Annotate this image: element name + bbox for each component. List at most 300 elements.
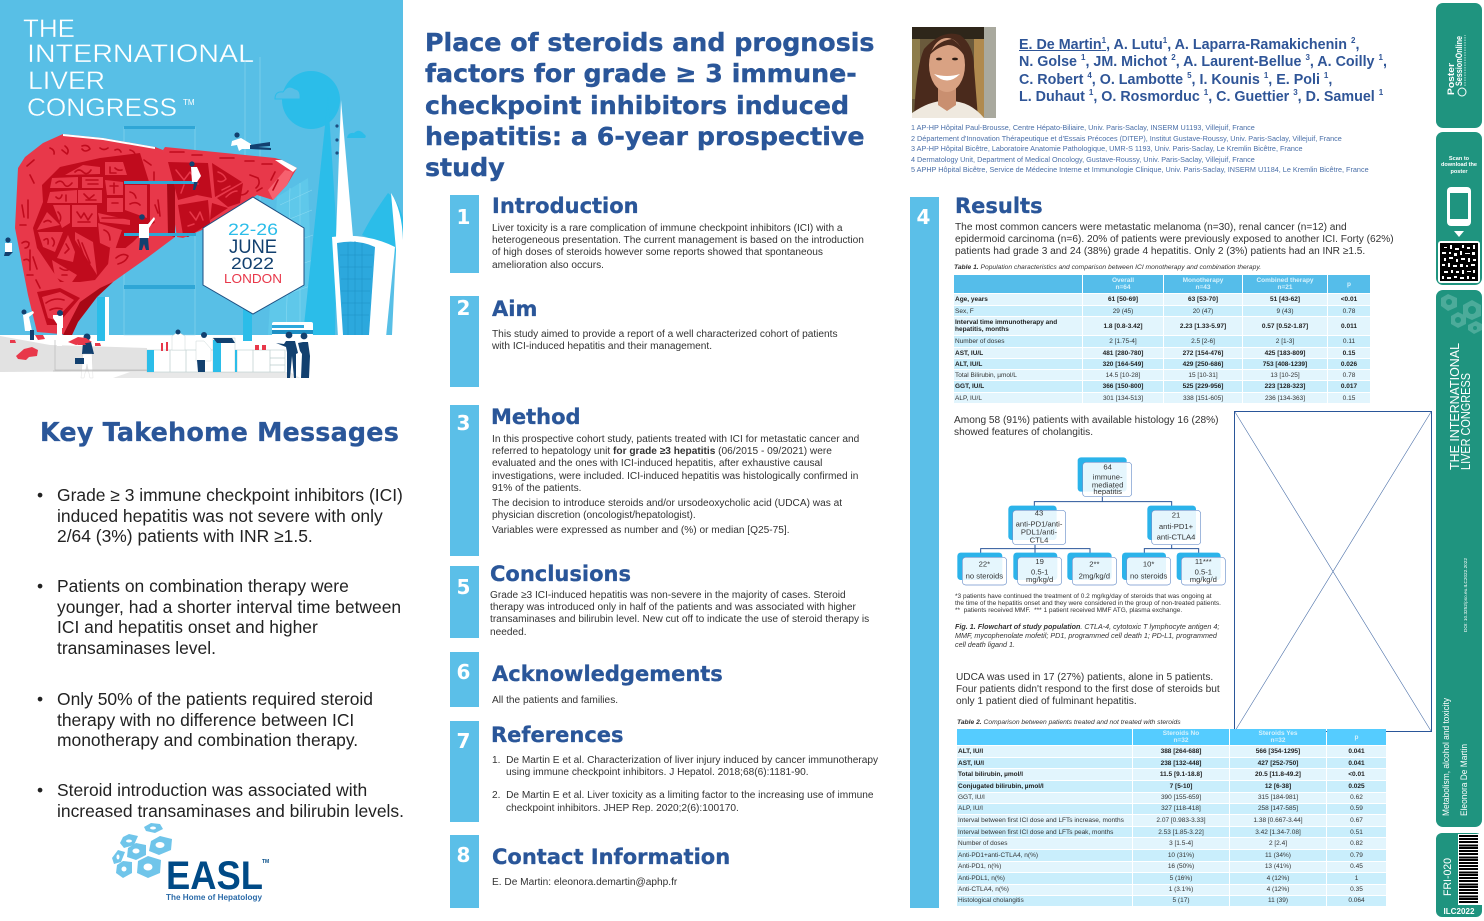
box: 64 immune-mediated hepatitis xyxy=(1078,457,1132,497)
takehome message 2: Patients on combination therapy were xyxy=(57,576,349,596)
scan to download panel: Scan to xyxy=(1449,156,1470,162)
congress side panel xyxy=(1436,290,1482,827)
table 2: ALP, IU/l xyxy=(958,805,983,812)
author photo xyxy=(912,27,996,118)
section 8 text: E. De Martin: eleonora.demartin@aphp.fr xyxy=(492,877,677,888)
section 1 number bar xyxy=(450,195,479,273)
table 2: 4 (12%) xyxy=(1267,875,1289,882)
takehome message 1 xyxy=(37,485,403,546)
takehome message 1: • xyxy=(37,485,43,505)
table 1: 20 (47) xyxy=(1193,308,1213,314)
table 2: 0.62 xyxy=(1350,794,1363,801)
histology text: Among 58 (91%) patients with available histology 16 (28%) xyxy=(954,415,1219,426)
table 2: 3.42 [1.34-7.08] xyxy=(1255,828,1301,836)
section 2 text: This study aimed to provide a report of a well characterized cohort of patients xyxy=(492,329,838,340)
congress name: INTERNATIONAL xyxy=(27,40,254,68)
box: 22 no steroids: 22* xyxy=(979,560,990,569)
box: 2 2mg/kg/d xyxy=(1067,553,1117,585)
date hexagon xyxy=(203,197,304,314)
congress name: TM xyxy=(183,98,195,107)
section 7 text: 1. De Martin E et al. Characterization of liver injury induced by cancer immunotherapy xyxy=(492,755,878,766)
table 1: GGT, IU/L xyxy=(955,383,984,390)
section 7 text: using immune checkpoint inhibitors. J Hepatol. 2018;68(6):1181-90. xyxy=(506,767,809,778)
table 2: 5 (16%) xyxy=(1170,875,1192,882)
EASL logo: EASL xyxy=(166,854,263,898)
table 2: 238 [132-448] xyxy=(1161,760,1201,766)
table 1: 0.15 xyxy=(1343,394,1355,402)
table 2: Histological cholangitis xyxy=(958,897,1024,904)
poster number and barcode: FRI-020 xyxy=(1442,858,1454,896)
authors list: C. Robert 4, O. Lambotte 5, I. Kounis 1, E. Poli 1, xyxy=(1019,71,1332,88)
takehome message 2: ICI and hepatitis onset and higher xyxy=(57,617,318,637)
table 1: 429 [250-686] xyxy=(1183,360,1223,368)
table 1: 63 [53-70] xyxy=(1188,296,1218,303)
section 3 number bar: 3 xyxy=(457,411,470,435)
table 2: 1 xyxy=(1355,875,1358,882)
section 3 text: referred to hepatology unit for grade ≥3 hepatitis (06/2015 - 09/2021) were xyxy=(492,446,832,457)
table 2: 390 [155-659] xyxy=(1161,794,1201,801)
poster title: hepatitis: a 6-year prospective xyxy=(425,122,865,151)
congress side panel: THE INTERNATIONAL xyxy=(1448,343,1462,470)
box: 2 2mg/kg/d: 2** xyxy=(1089,560,1099,569)
poster title xyxy=(425,28,874,182)
table 2: Anti-CTLA4, n(%) xyxy=(958,886,1009,893)
table 2: <0.01 xyxy=(1348,771,1365,778)
section 7 text xyxy=(492,755,878,814)
box: 22 no steroids: no steroids xyxy=(966,571,1003,580)
box: 19 0.5-1 mg/kg/d: 0.5-1 xyxy=(1031,567,1048,576)
takehome message 4: increased transaminases and bilirubin levels. xyxy=(57,801,404,821)
figure 1 caption: Fig. 1. Flowchart of study population. CTLA-4, cytotoxic T lymphocyte antigen 4; xyxy=(955,622,1219,631)
table 2: 258 [147-585] xyxy=(1258,805,1298,812)
liver xyxy=(15,134,297,335)
side strip xyxy=(1436,3,1482,917)
box: 11 0.5-1 mg/kg/d: 11*** xyxy=(1195,557,1212,566)
EASL logo xyxy=(112,823,269,902)
table 2: 2.53 [1.85-3.22] xyxy=(1158,828,1204,836)
section 1 heading: Introduction xyxy=(492,194,639,218)
takehome message 3: monotherapy and combination therapy. xyxy=(57,730,358,750)
takehome message 3 xyxy=(37,689,373,750)
table 1: ALT, IU/L xyxy=(955,360,982,368)
takehome message 4 xyxy=(37,780,404,821)
box: 43 anti-PD1: 43 xyxy=(1035,509,1043,518)
box: 22 no steroids xyxy=(957,553,1007,585)
box: 2 2mg/kg/d: 2mg/kg/d xyxy=(1079,571,1110,580)
table 2 caption: Table 2. Comparison between patients treated and not treated with steroids xyxy=(957,719,1181,726)
congress side panel: Metabolism, alcohol and toxicity xyxy=(1440,698,1451,816)
takehome message 3: therapy with no difference between ICI xyxy=(57,710,354,730)
table 2: Anti-PD1, n(%) xyxy=(958,863,1001,870)
table 1: ALP, IU/L xyxy=(955,394,982,402)
table 1: 0.017 xyxy=(1341,383,1357,390)
table 2: 327 [118-418] xyxy=(1161,805,1201,812)
table 1: 0.78 xyxy=(1343,372,1355,378)
results intro text xyxy=(955,222,1394,257)
affiliations: 3 AP-HP Hôpital Bicêtre, Laboratoire Anatomie Pathologique, UMR-S 1193, Univ. Paris-Saclay, Le Kremlin Bicêtre, France xyxy=(911,144,1303,153)
table 2: Interval between first ICI dose and LFTs peak, months xyxy=(958,828,1113,836)
section 5 text: Grade ≥3 ICI-induced hepatitis was non-severe in the majority of cases. Steroid xyxy=(490,590,846,601)
table 1: 366 [150-800] xyxy=(1103,383,1143,390)
table 2: 7 [5-10] xyxy=(1170,783,1192,790)
table 1: n=21 xyxy=(1278,284,1292,291)
authors list xyxy=(1019,36,1387,105)
takehome message 2: • xyxy=(37,576,43,596)
authors list: N. Golse 1, JM. Michot 2, A. Laurent-Bellue 3, A. Coilly 1, xyxy=(1019,54,1387,70)
section 4 number bar xyxy=(910,197,939,908)
section 1 text: heterogeneous presentation. The current management is based on the introduction xyxy=(492,235,864,246)
table 1 caption: Table 1. Population characteristics and comparison between ICI monotherapy and combination therapy. xyxy=(954,264,1261,271)
poster title: factors for grade ≥ 3 immune- xyxy=(425,59,857,88)
UDCA text: Four patients didn't respond to the first dose of steroids but xyxy=(956,684,1220,695)
table 2: 0.025 xyxy=(1348,783,1365,790)
box: 10 no steroids: no steroids xyxy=(1130,571,1168,580)
table 2: 11.5 [9.1-18.8] xyxy=(1160,771,1202,778)
table 2: Number of doses xyxy=(958,840,1008,847)
table 1: 236 [134-363] xyxy=(1265,394,1305,402)
table 2: AST, IU/l xyxy=(958,760,984,766)
inner dark regions xyxy=(33,153,150,282)
results intro text: The most common cancers were metastatic melanoma (n=30), renal cancer (n=12) and xyxy=(955,222,1347,233)
table 2: Conjugated bilirubin, µmol/l xyxy=(958,783,1044,790)
scan to download panel: download the xyxy=(1441,162,1477,168)
section 4 number bar: 4 xyxy=(917,205,930,229)
figure 1 caption: cell death ligand 1. xyxy=(955,640,1015,649)
table 1: Number of doses xyxy=(955,338,1004,345)
section 6 number bar: 6 xyxy=(457,660,470,684)
table 2: 0.59 xyxy=(1350,805,1363,812)
rock debris xyxy=(10,335,101,360)
takehome message 1: 2/64 (3%) patients with INR ≥1.5. xyxy=(57,526,313,546)
table 1: 425 [183-809] xyxy=(1265,350,1305,356)
congress name: LIVER xyxy=(28,67,105,95)
section 7 heading: References xyxy=(491,723,624,747)
takehome message 2: younger, had a shorter interval time between xyxy=(57,597,401,617)
table 2: 11 (34%) xyxy=(1265,852,1291,858)
section 3 text: 91% of the patients. xyxy=(492,483,582,494)
scan to download panel xyxy=(1436,132,1482,285)
table 1: Overall xyxy=(1112,277,1134,284)
section 6 text: All the patients and families. xyxy=(492,695,618,706)
section 5 number bar xyxy=(450,566,479,638)
flowchart of study population xyxy=(957,457,1226,586)
table 1: 2 [1-3] xyxy=(1276,338,1294,345)
table 1: 0.011 xyxy=(1341,322,1357,330)
table 2: 0.51 xyxy=(1350,828,1363,836)
section 2 text: with ICI-induced hepatitis and their management. xyxy=(492,341,712,352)
section 3 number bar xyxy=(450,405,479,556)
section 5 text xyxy=(490,590,869,638)
section 5 text: transaminases and bilirubin level. New cut off to indicate the use of steroid therapy is xyxy=(490,614,869,625)
section 7 number bar xyxy=(450,721,479,822)
section 8 number bar: 8 xyxy=(457,843,470,867)
congress banner illustration xyxy=(0,0,403,378)
box: 64 immune-mediated hepatitis: mediated xyxy=(1092,480,1123,489)
table 2: 11 (39) xyxy=(1268,897,1288,904)
table 1: 29 (45) xyxy=(1113,308,1133,314)
table 2: 13 (41%) xyxy=(1265,863,1291,870)
section 3 text: evaluated and the ones with ICI-induced hepatitis, after exhaustive causal xyxy=(492,458,822,469)
takehome message 1: Grade ≥ 3 immune checkpoint inhibitors (ICI) xyxy=(57,485,403,505)
table 1: AST, IU/L xyxy=(955,350,983,356)
table 2: 0.064 xyxy=(1348,897,1365,904)
poster title: study xyxy=(425,153,505,182)
section 3 text: investigations, were included. ICI-induced hepatitis was histologically confirmed in xyxy=(492,471,858,482)
congress side panel: Eleonora De Martin xyxy=(1458,744,1469,816)
table 2: 1 (3.1%) xyxy=(1169,886,1193,893)
table 1: 223 [128-323] xyxy=(1265,383,1305,390)
box: 64 immune-mediated hepatitis: 64 xyxy=(1103,462,1113,471)
box: 10 no steroids: 10* xyxy=(1143,560,1154,569)
table 2: n=32 xyxy=(1174,737,1188,744)
table 1: 525 [229-956] xyxy=(1183,383,1223,390)
table 1: 0.15 xyxy=(1343,350,1355,356)
takehome message 1: induced hepatitis was not severe with only xyxy=(57,506,383,526)
table 1: 13 [10-25] xyxy=(1270,372,1300,378)
UDCA text: only 1 patient died of fulminant hepatitis. xyxy=(956,696,1137,707)
table 2: 388 [264-688] xyxy=(1161,748,1201,755)
table 2: 20.5 [11.8-49.2] xyxy=(1255,771,1301,778)
EASL logo: The Home of Hepatology xyxy=(166,892,262,902)
flowchart footnotes: the time of the hepatitis onset and they were considered in the group of non-treated patients. xyxy=(955,600,1221,607)
table 1: 51 [43-62] xyxy=(1270,296,1300,303)
poster title: Place of steroids and prognosis xyxy=(425,28,874,57)
table 1: 0.026 xyxy=(1341,360,1357,368)
section 1 text: of high doses of steroids however some reports showed that spontaneous xyxy=(492,247,823,258)
table 2: 0.45 xyxy=(1350,863,1363,870)
affiliations xyxy=(911,123,1369,174)
table 1: 320 [164-549] xyxy=(1103,360,1143,368)
table 2: n=32 xyxy=(1270,737,1286,744)
table 2: 0.041 xyxy=(1348,748,1365,755)
date hexagon: 22-26 xyxy=(228,220,278,239)
section 6 heading: Acknowledgements xyxy=(492,662,723,686)
heading: key takehome messages: Key Takehome Messages xyxy=(40,417,399,447)
table 2: p xyxy=(1354,734,1358,740)
affiliations: 1 AP-HP Hôpital Paul-Brousse, Centre Hépato-Biliaire, Univ. Paris-Saclay, INSERM U1193, Villejuif, France xyxy=(911,123,1255,132)
section 3 text: In this prospective cohort study, patients treated with ICI for metastatic cancer and xyxy=(492,434,859,445)
poster title: checkpoint inhibitors induced xyxy=(425,91,849,120)
table 2: 427 [252-750] xyxy=(1258,760,1298,766)
table 2: 12 [6-38] xyxy=(1265,783,1291,790)
histology text: showed features of cholangitis. xyxy=(954,427,1093,438)
box: 64 immune-mediated hepatitis: immune- xyxy=(1093,472,1123,481)
congress name: CONGRESS xyxy=(27,94,177,122)
table 2: 315 [184-981] xyxy=(1258,794,1298,801)
placeholder image box xyxy=(1234,411,1432,732)
table 2: Total bilirubin, µmol/l xyxy=(958,771,1023,778)
table 2 xyxy=(957,729,1386,906)
box: 43 anti-PD1: anti-PD1/anti- xyxy=(1016,519,1063,528)
table 1: 15 [10-31] xyxy=(1188,372,1218,378)
takehome message 4: • xyxy=(37,780,43,800)
table 1: <0.01 xyxy=(1341,296,1357,303)
table 1: 0.57 [0.52-1.87] xyxy=(1262,322,1308,330)
table 2: 3 [1.5-4] xyxy=(1169,840,1193,847)
poster session online badge: Poster xyxy=(1446,62,1456,95)
congress side panel: DOI: 10.3252/pso.eu.ILC2022.2022 xyxy=(1463,557,1468,632)
table 2: Interval between first ICI dose and LFTs increase, months xyxy=(958,817,1124,824)
poster session online badge: SessionOnline xyxy=(1454,36,1464,86)
box: 43 anti-PD1 xyxy=(1008,506,1066,545)
table 1: n=43 xyxy=(1196,284,1210,291)
table 2: Anti-PD1+anti-CTLA4, n(%) xyxy=(958,852,1038,858)
box: 21 anti-PD1+anti-CTLA4: 21 xyxy=(1172,511,1180,520)
table 2: GGT, IU/l xyxy=(958,794,985,801)
scan to download panel: poster xyxy=(1450,169,1468,175)
table 1: 2 [1.75-4] xyxy=(1109,338,1137,345)
table 1: Age, years xyxy=(955,296,988,303)
UDCA text: UDCA was used in 17 (27%) patients, alone in 5 patients. xyxy=(956,672,1213,683)
date hexagon: JUNE xyxy=(229,237,277,258)
takehome message 3: • xyxy=(37,689,43,709)
walking woman xyxy=(82,342,94,354)
table 1: 0.78 xyxy=(1343,308,1355,314)
authors list: L. Duhaut 1, O. Rosmorduc 1, C. Guettier 3, D. Samuel 1 xyxy=(1019,88,1383,105)
authors list: E. De Martin1, A. Lutu1, A. Laparra-Ramakichenin 2, xyxy=(1019,36,1359,53)
section 2 text xyxy=(492,329,838,352)
EASL logo: TM xyxy=(262,859,269,865)
table 2: 0.79 xyxy=(1350,852,1363,858)
section 5 text: therapy was introduced only in half of the patients and was associated with higher xyxy=(490,602,856,613)
table 2: Steroids No xyxy=(1163,730,1199,737)
congress name xyxy=(23,15,254,122)
section 2 number bar xyxy=(450,296,479,387)
table 2: 0.67 xyxy=(1350,817,1363,824)
section 7 number bar: 7 xyxy=(457,729,470,753)
table 2: 5 (17) xyxy=(1172,897,1189,904)
section 1 text: amelioration also occurs. xyxy=(492,260,604,271)
table 2: 0.82 xyxy=(1350,840,1363,847)
table 1: 2.23 [1.33-5.97] xyxy=(1180,322,1226,330)
table 1: n=64 xyxy=(1116,284,1130,291)
table 1: Combined therapy xyxy=(1256,277,1314,284)
date hexagon: LONDON xyxy=(224,271,282,286)
box: 43 anti-PD1: CTL4 xyxy=(1030,535,1049,544)
section 3 text xyxy=(492,434,859,536)
table 1: p xyxy=(1347,280,1351,288)
figure 1 caption: MMF, mycophenolate mofetil; PD1, programmed cell death 1; PD-L1, programmed xyxy=(955,631,1217,640)
section 3 text: Variables were expressed as number and (%) or median [Q25-75]. xyxy=(492,525,790,536)
box: 11 0.5-1 mg/kg/d: 0.5-1 xyxy=(1195,567,1212,576)
poster session online badge xyxy=(1436,3,1482,128)
liver cells xyxy=(37,162,147,320)
section 5 heading: Conclusions xyxy=(490,562,631,586)
table 1: Monotherapy xyxy=(1183,277,1223,284)
takehome message 4: Steroid introduction was associated with xyxy=(57,780,367,800)
section 3 text: The decision to introduce steroids and/or ursodeoxycholic acid (UDCA) was at xyxy=(492,498,842,509)
table 2: Anti-PDL1, n(%) xyxy=(958,875,1005,882)
section 5 number bar: 5 xyxy=(457,575,470,599)
results intro text: epidermoid carcinoma (n=6). 20% of patients were previously exposed to another ICI. Forty (62%) xyxy=(955,234,1394,245)
table 2: 2 [2.4] xyxy=(1269,840,1287,847)
affiliations: 5 APHP Hôpital Bicêtre, Service de Médecine Interne et Immunologie Clinique, Univ. Paris-Saclay, INSERM U1184, Le Kremlin Bicêtre, France xyxy=(911,165,1369,174)
table 2: Steroids Yes xyxy=(1259,730,1297,737)
affiliations: 2 Département d'Innovation Thérapeutique et d'Essais Précoces (DITEP), Institut Gustave-Roussy, Univ. Paris-Saclay, Villejuif, France xyxy=(911,134,1342,143)
table 2: 0.35 xyxy=(1350,886,1363,893)
results intro text: patients had grade 3 and 24 (38%) grade 4 hepatitis. Only 2 (3%) patients had an INR ≥1.5. xyxy=(955,246,1365,257)
table 1: 61 [50-69] xyxy=(1108,296,1138,303)
table 1: Total Bilirubin, µmol/L xyxy=(955,372,1017,378)
box: 11 0.5-1 mg/kg/d: mg/kg/d xyxy=(1190,575,1217,584)
box: 19 0.5-1 mg/kg/d: 19 xyxy=(1035,557,1044,566)
section 7 text: 2. De Martin E et al. Liver toxicity as a limiting factor to the increasing use of immune xyxy=(492,790,874,801)
congress side panel: LIVER CONGRESS xyxy=(1459,373,1473,470)
flowchart footnotes: ** patients received MMF. *** 1 patient received MMF ATG, plasma exchange. xyxy=(955,607,1182,614)
table 1: 272 [154-476] xyxy=(1183,350,1223,356)
section 1 text: Liver toxicity is a rare complication of immune checkpoint inhibitors (ICI) with a xyxy=(492,223,843,234)
table 1: Sex, F xyxy=(955,308,974,314)
takehome message 2 xyxy=(37,576,401,658)
box: 19 0.5-1 mg/kg/d xyxy=(1013,553,1062,585)
takehome message 2: transaminases level. xyxy=(57,638,216,658)
box: 64 immune-mediated hepatitis: hepatitis xyxy=(1093,487,1122,496)
table 1: 1.8 [0.8-3.42] xyxy=(1103,322,1143,330)
table 2: 2.07 [0.983-3.33] xyxy=(1156,817,1206,824)
section 1 text xyxy=(492,223,864,271)
skyline xyxy=(97,57,403,341)
box: 43 anti-PD1: PDL1/anti- xyxy=(1021,527,1058,536)
box: 21 anti-PD1+anti-CTLA4: anti-CTLA4 xyxy=(1157,532,1196,541)
lab benches xyxy=(147,350,285,372)
section 2 number bar: 2 xyxy=(457,296,470,320)
section 8 number bar xyxy=(450,835,479,908)
section 2 heading: Aim xyxy=(492,297,537,321)
section 5 text: needed. xyxy=(490,627,527,638)
table 1: 338 [151-605] xyxy=(1183,394,1223,402)
box: 11 0.5-1 mg/kg/d xyxy=(1177,553,1225,585)
section 4 heading: Results xyxy=(955,194,1043,218)
table 2: 16 (50%) xyxy=(1168,863,1194,870)
UDCA text xyxy=(956,672,1220,707)
people and laboratory xyxy=(4,132,310,378)
box: 21 anti-PD1+anti-CTLA4 xyxy=(1147,506,1201,545)
table 1: 301 [134-513] xyxy=(1103,394,1143,402)
section 1 number bar: 1 xyxy=(457,205,470,229)
section 3 heading: Method xyxy=(491,405,581,429)
table 2: 0.041 xyxy=(1348,760,1365,766)
table 1: 2.5 [2-6] xyxy=(1191,338,1215,345)
takehome message 3: Only 50% of the patients required steroid xyxy=(57,689,373,709)
section 7 text: checkpoint inhibitors. JHEP Rep. 2020;2(6):100170. xyxy=(506,803,739,814)
section 3 text: physician discretion (oncologist/hepatologist). xyxy=(492,510,696,521)
poster number and barcode: ILC2022 xyxy=(1444,906,1475,916)
date hexagon: 2022 xyxy=(231,255,274,273)
affiliations: 4 Dermatology Unit, Department of Medical Oncology, Gustave-Roussy, Univ. Paris-Saclay, Villejuif, France xyxy=(911,155,1255,164)
box: 19 0.5-1 mg/kg/d: mg/kg/d xyxy=(1026,575,1053,584)
flowchart footnotes xyxy=(955,592,1221,614)
table 1 xyxy=(954,275,1370,403)
section 6 number bar xyxy=(450,652,479,707)
table 2: 4 (12%) xyxy=(1267,886,1289,893)
table 1: 0.11 xyxy=(1343,338,1355,345)
figure 1 caption xyxy=(955,622,1220,649)
table 2: ALT, IU/l xyxy=(958,748,983,755)
box: 10 no steroids xyxy=(1122,553,1171,585)
table 1: Interval time immunotherapy and xyxy=(955,319,1057,326)
table 2: 1.38 [0.667-3.44] xyxy=(1253,817,1303,824)
table 1: hepatitis, months xyxy=(955,326,1009,333)
box: 21 anti-PD1+anti-CTLA4: anti-PD1+ xyxy=(1159,522,1194,531)
histology text xyxy=(954,415,1219,438)
table 2: 566 [354-1295] xyxy=(1256,748,1300,755)
table 1: 14.5 [10-28] xyxy=(1106,372,1140,378)
poster number and barcode xyxy=(1436,833,1482,917)
flowchart footnotes: *3 patients have continued the treatment of 0.2 mg/kg/day of steroids that was ongoing at xyxy=(955,592,1212,600)
section 8 heading: Contact Information xyxy=(492,845,730,869)
table 1: 9 (43) xyxy=(1276,308,1293,314)
congress name: THE xyxy=(23,15,75,43)
